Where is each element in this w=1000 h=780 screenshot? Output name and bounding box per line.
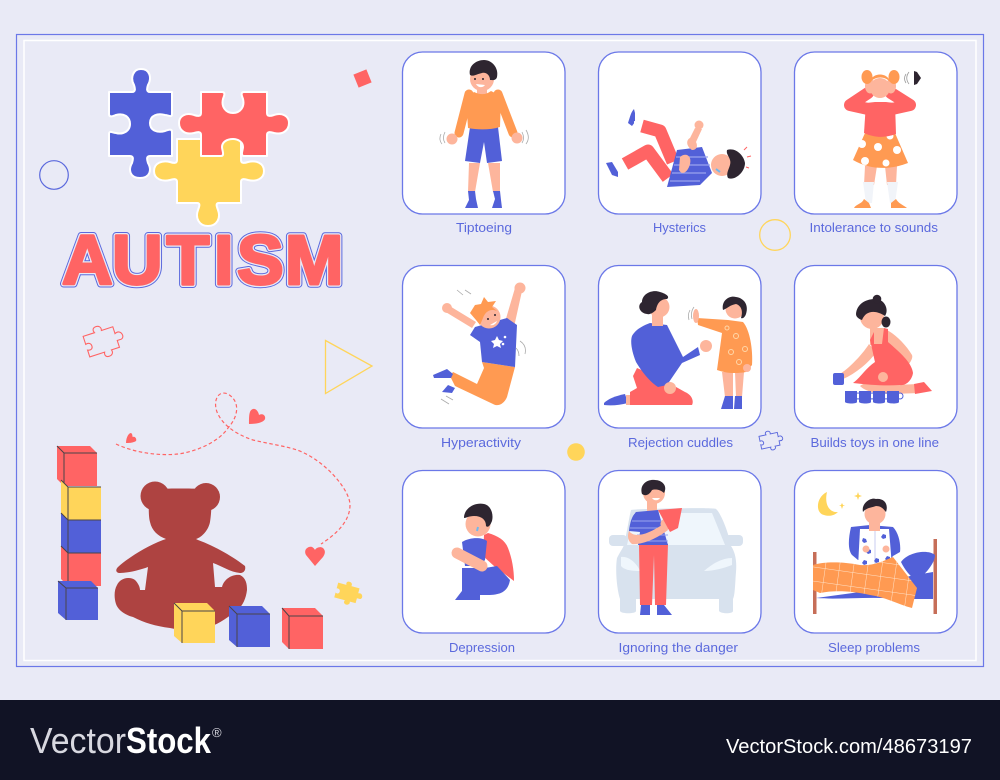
decoration: yellow circle outline xyxy=(760,220,790,250)
decoration: yellow dot xyxy=(567,443,585,461)
decoration: yellow triangle xyxy=(326,340,372,394)
label: Ignoring the danger xyxy=(618,640,739,655)
panel: ignoring the danger xyxy=(598,470,761,655)
footer logo: ® xyxy=(212,725,222,740)
frame: outer blue border xyxy=(16,34,984,666)
footer logo: Stock xyxy=(126,720,212,761)
dashed heart trail xyxy=(116,393,350,544)
block: blue xyxy=(61,513,101,553)
figure: boy reading book xyxy=(628,480,682,615)
icon: large heart xyxy=(305,547,325,566)
decoration: blue puzzle outline xyxy=(758,428,785,452)
figure: jumping boy xyxy=(433,282,526,405)
figure: refusing girl xyxy=(688,297,752,409)
panel: intolerance to sounds xyxy=(794,52,957,235)
panel: sleep problems xyxy=(794,470,957,655)
figure: girl covering ears xyxy=(850,70,921,208)
footer logo: Vector xyxy=(30,720,126,761)
block: blue floor xyxy=(229,606,270,647)
decoration: red puzzle outline xyxy=(81,320,128,362)
puzzle piece: yellow xyxy=(154,139,264,226)
label: Tiptoeing xyxy=(456,220,512,235)
label: Rejection cuddles xyxy=(628,435,734,450)
decoration: red square xyxy=(353,69,372,88)
icon: puzzle pieces xyxy=(109,69,289,226)
puzzle piece: blue xyxy=(109,69,172,178)
figure: boy on floor xyxy=(606,109,751,187)
block: blue bottom xyxy=(58,581,98,620)
footer image id: VectorStock.com/48673197 xyxy=(726,736,972,758)
frame: inner white border xyxy=(24,40,976,660)
figure: bed with boy xyxy=(813,499,937,614)
icon: medium heart xyxy=(249,409,265,424)
icon: moon and stars xyxy=(818,492,862,516)
puzzle piece: red xyxy=(179,92,289,156)
panel: depression xyxy=(402,470,565,655)
label: Hyperactivity xyxy=(441,435,522,450)
block: red top xyxy=(57,446,97,486)
title: AUTISM xyxy=(62,221,343,299)
label: Hysterics xyxy=(653,220,706,235)
figure: sad boy hugging knees xyxy=(455,504,514,600)
panel: hyperactivity xyxy=(402,266,565,450)
teddy bear silhouette xyxy=(115,482,247,630)
title: AUTISM xyxy=(62,221,343,299)
decoration: blue circle xyxy=(40,161,68,189)
footer logo xyxy=(30,720,222,761)
panel: rejection cuddles xyxy=(598,266,761,450)
title: AUTISM xyxy=(62,221,343,299)
icon: car xyxy=(609,508,743,613)
block: red xyxy=(61,546,101,586)
panel: hysterics xyxy=(598,52,761,235)
label: Builds toys in one line xyxy=(810,435,939,450)
figure: girl with cups xyxy=(833,295,932,404)
block: red floor xyxy=(282,608,323,649)
cups row xyxy=(845,391,903,404)
decoration: yellow puzzle xyxy=(333,579,365,608)
footer bar xyxy=(0,700,1000,780)
figure: tiptoeing boy xyxy=(440,60,528,208)
block: yellow xyxy=(61,480,101,520)
panel: builds toys in one line xyxy=(794,266,957,450)
figure: kneeling woman xyxy=(604,291,712,405)
label: Depression xyxy=(449,640,515,655)
label: Sleep problems xyxy=(828,640,921,655)
block: yellow floor xyxy=(174,603,215,643)
panel: tiptoeing xyxy=(402,52,565,235)
icon: small heart xyxy=(126,433,136,443)
toy block stack xyxy=(57,446,323,649)
label: Intolerance to sounds xyxy=(810,220,939,235)
